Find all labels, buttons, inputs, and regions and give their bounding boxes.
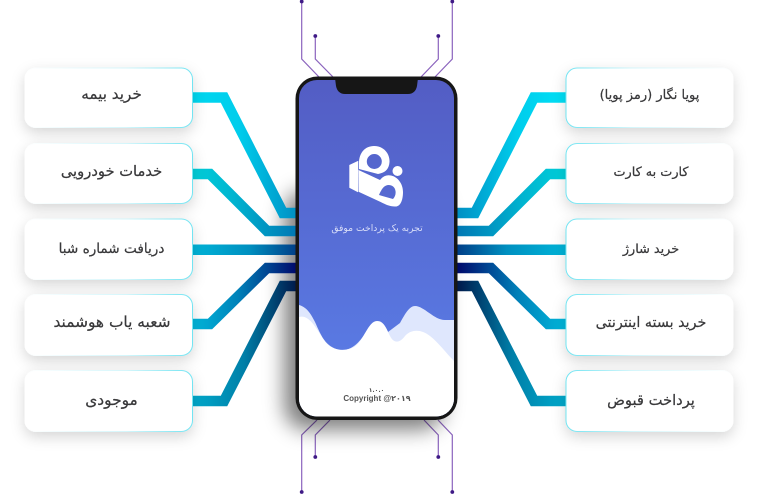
card: کارت به کارت xyxy=(566,144,733,204)
connectors: left xyxy=(190,98,298,401)
version: ۱.۰.۰ xyxy=(369,387,384,394)
card: دریافت شماره شبا xyxy=(25,219,192,280)
card: پرداخت قبوض: پرداخت قبوض xyxy=(607,392,695,409)
tagline: تجربه یک پرداخت موفق xyxy=(331,223,423,234)
phone body xyxy=(296,76,458,420)
card: موجودی: موجودی xyxy=(85,391,138,409)
card: خرید بسته اینترنتی: خرید بسته اینترنتی xyxy=(596,315,706,331)
card: پویا نگار (رمز پویا) xyxy=(566,68,733,128)
card: پویا نگار (رمز پویا): پویا نگار (رمز پویا) xyxy=(600,87,700,103)
card: خدمات خودرویی xyxy=(25,144,192,204)
card: دریافت شماره شبا: دریافت شماره شبا xyxy=(59,241,164,257)
card: کارت به کارت: کارت به کارت xyxy=(614,165,689,180)
connectors: right xyxy=(456,98,568,401)
card: خرید شارژ xyxy=(566,219,733,280)
circuit lines: top xyxy=(300,0,454,77)
card: خرید بیمه: خرید بیمه xyxy=(81,85,142,103)
copyright: Copyright @۲۰۱۹ xyxy=(343,394,411,403)
phone shadow xyxy=(284,190,444,430)
card: پرداخت قبوض xyxy=(566,370,733,432)
card: خرید بیمه xyxy=(25,68,192,128)
card: خرید بسته اینترنتی xyxy=(566,294,733,356)
card: شعبه یاب هوشمند: شعبه یاب هوشمند xyxy=(53,313,171,331)
card: شعبه یاب هوشمند xyxy=(25,294,192,356)
card: خدمات خودرویی: خدمات خودرویی xyxy=(61,163,162,180)
card: خرید شارژ: خرید شارژ xyxy=(622,242,679,257)
logo xyxy=(349,146,403,207)
circuit lines: bottom xyxy=(300,420,454,494)
phone xyxy=(296,76,458,420)
card: موجودی xyxy=(25,370,192,432)
phone screen xyxy=(299,80,454,417)
phone notch xyxy=(335,78,418,94)
